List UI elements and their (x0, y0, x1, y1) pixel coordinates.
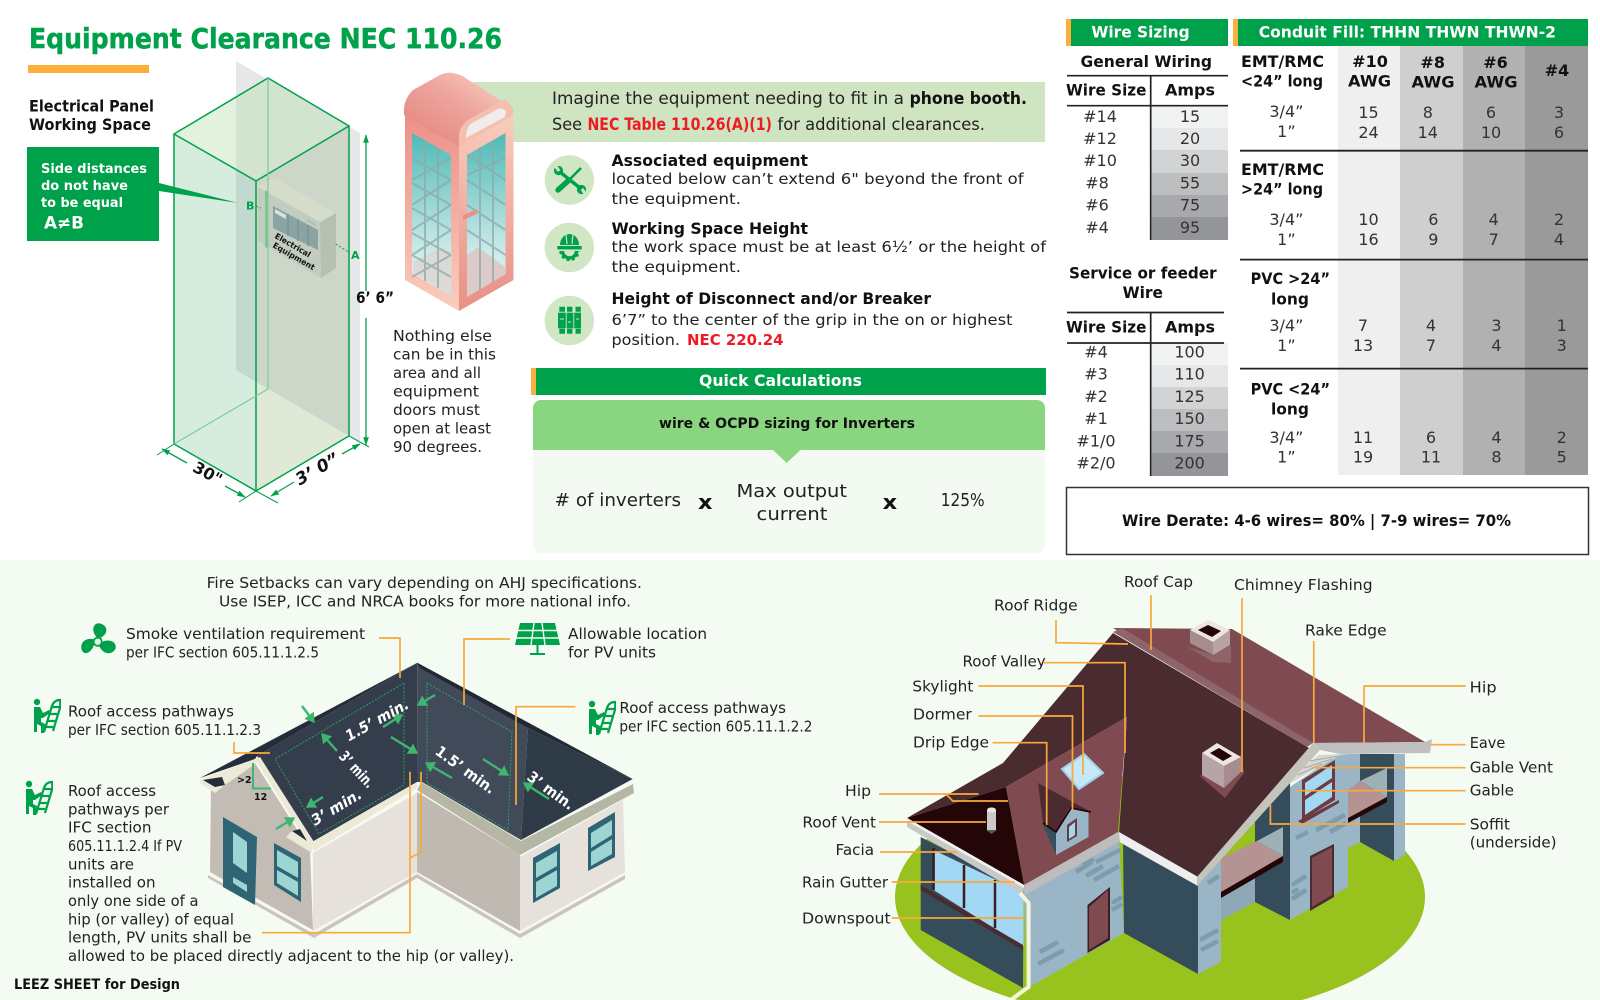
icon: tools (545, 155, 594, 205)
table: service or feeder wire: Service or feeder (1069, 264, 1217, 283)
text: nothing else can be in this area: doors must (393, 401, 480, 419)
row: PVC over 24 in: 1” (1277, 336, 1296, 355)
row: PVC under 24 in: 1” (1277, 448, 1296, 466)
title: Equipment Clearance NEC 110.26 (29, 22, 502, 55)
electrical equipment box: Equipment (271, 241, 316, 272)
panel: quick calculation formula: x (883, 490, 897, 514)
table: general wiring: 15 (1180, 107, 1200, 126)
item: height of disconnect: Height of Disconnect and/or Breaker (612, 289, 931, 308)
banner: phone booth: See (552, 115, 582, 134)
header: wire sizing (1066, 19, 1228, 46)
setback dashed outlines (275, 683, 512, 834)
callout: side distances: A≠B (44, 214, 84, 234)
table: conduit fill: #8 (1420, 53, 1445, 72)
label: smoke ventilation (126, 625, 400, 678)
table: general wiring: 20 (1180, 129, 1200, 148)
row: EMT/RMC under 24 in: 3 (1554, 103, 1564, 122)
icon: breaker (545, 296, 594, 345)
label: roof ridge (994, 597, 1128, 644)
table: service or feeder wire: 150 (1174, 409, 1205, 428)
table: general wiring: General Wiring (1080, 52, 1212, 71)
row: PVC under 24 in: 2 (1557, 428, 1567, 447)
row: EMT/RMC over 24 in (1241, 160, 1564, 249)
header: wire sizing: Wire Sizing (1091, 22, 1190, 42)
subheading: electrical panel working space: Working Space (29, 115, 151, 134)
skylight (1062, 754, 1103, 789)
banner: phone booth (473, 82, 1045, 142)
row: PVC over 24 in: 3 (1491, 316, 1502, 335)
row: EMT/RMC under 24 in: 15 (1358, 103, 1379, 122)
darkest hip plane (907, 787, 1024, 885)
item: height of disconnect: NEC 220.24 (687, 331, 784, 349)
subheading: electrical panel working space (29, 96, 154, 134)
row: PVC under 24 in: 19 (1353, 448, 1373, 466)
table: general wiring: 30 (1180, 151, 1200, 170)
row: EMT/RMC under 24 in: 6 (1554, 123, 1564, 142)
panel: quick calculation formula: # of inverters (555, 490, 681, 511)
item: associated equipment: the equipment. (612, 190, 741, 208)
text: nothing else can be in this area: 90 degrees. (393, 438, 482, 456)
table: service or feeder wire: #3 (1084, 364, 1108, 384)
row: EMT/RMC over 24 in: 4 (1489, 210, 1499, 229)
label: roof access 605.11.1.2.4: IFC section (68, 819, 152, 837)
callout: side distances: to be equal (41, 195, 123, 211)
table: general wiring: 95 (1180, 218, 1200, 237)
label: roof access 605.11.1.2.3 (68, 703, 270, 753)
row: EMT/RMC under 24 in: 6 (1486, 103, 1496, 122)
table: service or feeder wire: Wire Size (1066, 318, 1147, 336)
roof dimension labels: 3’ min. (308, 785, 365, 829)
label: roof access 605.11.1.2.2: per IFC section 605.11.1.2.2 (619, 718, 812, 736)
label: skylight: Skylight (912, 678, 973, 696)
row: PVC under 24 in: 6 (1426, 428, 1436, 447)
banner: phone booth: for additional clearances. (778, 115, 985, 134)
icon: solar panel (515, 623, 560, 654)
row: PVC over 24 in: 7 (1358, 316, 1368, 335)
chimney back (1188, 620, 1231, 663)
label: hip left (845, 782, 1008, 801)
row: PVC over 24 in (1251, 269, 1567, 355)
table: service or feeder wire: #1/0 (1076, 432, 1116, 450)
label: hip right: Hip (1470, 679, 1497, 697)
label: skylight (912, 678, 1083, 775)
table: service or feeder wire: Wire (1123, 283, 1163, 302)
label: rake edge (1305, 622, 1387, 743)
subheading: electrical panel working space: Electrical Panel (29, 96, 154, 116)
label: eave (1430, 734, 1505, 752)
table: conduit fill: AWG (1412, 73, 1454, 92)
table: service or feeder wire (1066, 264, 1228, 476)
banner: phone booth: Imagine the equipment needing to fit in a (552, 89, 904, 108)
header: quick calculations (531, 368, 1046, 395)
item: associated equipment: located below can’t extend 6" beyond the front of (612, 170, 1024, 188)
illustration: house anatomy (895, 620, 1432, 1000)
panel: quick calculation formula: current (756, 504, 828, 525)
label: roof access 605.11.1.2.4: installed on (68, 874, 156, 892)
downspout (1012, 893, 1029, 999)
label: roof access 605.11.1.2.4: Roof access (68, 782, 156, 800)
item: height of disconnect: position. (612, 331, 680, 349)
label: roof access 605.11.1.2.4: hip (or valley) of equal (68, 910, 234, 928)
roof dimension labels: 3’ min. (524, 768, 578, 814)
text: nothing else can be in this area: can be in this (393, 346, 496, 364)
pitch indicator: >2 (237, 775, 252, 786)
label: soffit: Soffit (1470, 815, 1510, 833)
illustration: phone booth (404, 73, 514, 311)
illustration: fire setback house (200, 663, 634, 938)
label: hip left: Hip (845, 782, 871, 800)
table: service or feeder wire: #2/0 (1076, 454, 1116, 472)
working space 3D diagram: A (351, 249, 360, 262)
row: PVC under 24 in: 3/4” (1269, 428, 1303, 447)
row: PVC over 24 in: PVC >24” (1251, 269, 1330, 288)
labels: house anatomy (802, 573, 1556, 927)
row: PVC over 24 in: 3/4” (1269, 316, 1303, 335)
callout: side distances (27, 147, 238, 241)
label: roof access 605.11.1.2.4: 605.11.1.2.4 If PV (68, 837, 182, 855)
electrical equipment box (258, 178, 336, 278)
text: nothing else can be in this area (393, 327, 496, 456)
table: general wiring: #14 (1083, 107, 1117, 126)
title (28, 22, 502, 73)
roof dimension labels: 3’ min. (335, 747, 378, 792)
table: conduit fill: AWG (1348, 72, 1391, 90)
label: smoke ventilation: per IFC section 605.11.1.2.5 (126, 644, 319, 662)
item: height of disconnect (545, 289, 1012, 349)
icon: ventilation fan (81, 623, 116, 653)
row: PVC over 24 in: 4 (1426, 316, 1436, 335)
label: drip edge (913, 733, 1047, 825)
item: working space height (545, 219, 1047, 276)
label: soffit: (underside) (1470, 834, 1556, 852)
table: service or feeder wire: #4 (1084, 342, 1108, 362)
row: EMT/RMC over 24 in: 6 (1428, 210, 1438, 229)
dark roof plane (907, 633, 1309, 877)
label: roof access 605.11.1.2.4 (68, 772, 514, 965)
label: roof valley (962, 653, 1125, 753)
row: EMT/RMC over 24 in: 1” (1277, 230, 1296, 249)
label: dormer: Dormer (913, 705, 972, 723)
row: PVC over 24 in: 4 (1491, 336, 1502, 355)
text: fire setbacks: Use ISEP, ICC and NRCA books for more national info. (219, 593, 631, 611)
text: nothing else can be in this area: Nothing else (393, 327, 492, 345)
row: PVC under 24 in: 8 (1491, 448, 1502, 466)
row: EMT/RMC over 24 in: 2 (1554, 210, 1564, 229)
working space 3D diagram: 30" (190, 457, 226, 489)
label: allowable PV location: for PV units (568, 644, 656, 662)
text: fire setbacks (207, 574, 642, 611)
dormer (1038, 783, 1091, 855)
table: conduit fill: #6 (1483, 53, 1508, 72)
panel: quick calculation formula: Max output (736, 481, 847, 502)
table: general wiring: #12 (1083, 129, 1117, 148)
row: PVC under 24 in (1251, 380, 1567, 466)
label: gable vent: Gable Vent (1470, 759, 1553, 777)
table: service or feeder wire: 100 (1174, 342, 1205, 362)
label: roof access 605.11.1.2.3: per IFC section 605.11.1.2.3 (68, 721, 261, 739)
working space 3D diagram: B (246, 200, 254, 213)
label: roof cap: Roof Cap (1124, 573, 1193, 591)
label: roof valley: Roof Valley (962, 653, 1046, 671)
table: conduit fill (1240, 46, 1588, 475)
working space 3D diagram: 6’ 6” (356, 288, 394, 307)
label: drip edge: Drip Edge (913, 733, 989, 751)
row: EMT/RMC over 24 in: 9 (1428, 230, 1438, 249)
working space 3D diagram: 3’ 0” (292, 449, 343, 490)
roof dimension labels: 1.5’ min. (432, 742, 499, 798)
table: conduit fill: AWG (1474, 73, 1518, 92)
header: conduit fill (1233, 19, 1588, 46)
label: roof vent: Roof Vent (802, 813, 876, 831)
item: associated equipment (545, 151, 1024, 208)
table: conduit fill: #4 (1545, 61, 1569, 80)
table: general wiring: #6 (1085, 196, 1109, 214)
label: allowable PV location: Allowable location (568, 625, 707, 643)
label: roof access 605.11.1.2.4: length, PV units shall be (68, 929, 252, 947)
ground (895, 775, 1425, 1000)
label: roof access 605.11.1.2.2 (516, 699, 812, 805)
row: PVC over 24 in: 7 (1426, 336, 1436, 355)
table: conduit fill: #10 (1352, 52, 1388, 71)
row: PVC under 24 in: 11 (1421, 448, 1441, 466)
label: rain gutter: Rain Gutter (802, 873, 889, 891)
row: EMT/RMC over 24 in: 10 (1358, 210, 1379, 229)
panel: quick calculation formula (533, 400, 1045, 553)
label: roof cap (1124, 573, 1193, 650)
setback arrows (276, 695, 549, 829)
row: PVC over 24 in: 13 (1353, 336, 1373, 355)
row: EMT/RMC under 24 in: <24” long (1241, 72, 1323, 90)
row: PVC over 24 in: 3 (1557, 336, 1567, 355)
label: dormer (913, 705, 1072, 810)
table: general wiring: Wire Size (1066, 80, 1147, 99)
working space 3D diagram (157, 61, 394, 503)
row: PVC over 24 in: long (1271, 289, 1309, 308)
table: service or feeder wire: 125 (1174, 387, 1205, 406)
text: fire setbacks: Fire Setbacks can vary depending on AHJ specifications. (207, 574, 642, 592)
row: EMT/RMC under 24 in: 3/4” (1269, 102, 1303, 121)
windows (274, 812, 615, 903)
row: EMT/RMC under 24 in: 1” (1277, 122, 1296, 141)
banner: phone booth: NEC Table 110.26(A)(1) (588, 115, 772, 134)
row: EMT/RMC over 24 in: >24” long (1241, 180, 1323, 198)
label: downspout: Downspout (802, 909, 891, 927)
row: PVC under 24 in: 4 (1491, 428, 1502, 447)
row: PVC under 24 in: long (1271, 400, 1309, 418)
pitch indicator: 12 (254, 792, 267, 803)
label: eave: Eave (1470, 734, 1505, 752)
icon: roof access person lower (26, 780, 53, 815)
row: PVC under 24 in: PVC <24” (1251, 380, 1330, 398)
roof dimension labels: 1.5’ min. (342, 695, 412, 745)
panel: bottom background (0, 560, 1600, 1000)
roof vent (986, 808, 997, 834)
label: roof access 605.11.1.2.4: only one side of a (68, 892, 198, 910)
panel: quick calculation formula: x (698, 490, 713, 514)
label: roof access 605.11.1.2.2: Roof access pathways (619, 699, 786, 717)
pitch indicator (237, 763, 271, 803)
row: EMT/RMC under 24 in: 24 (1358, 123, 1379, 142)
row: EMT/RMC under 24 in (1241, 52, 1564, 142)
table: general wiring: 55 (1180, 174, 1200, 192)
table: general wiring: #4 (1085, 218, 1109, 237)
table: general wiring: Amps (1165, 80, 1215, 99)
door (223, 817, 257, 905)
icon: roof access person left (34, 698, 61, 733)
label: facia: Facia (836, 841, 874, 859)
icon: helmet and gear (545, 223, 594, 272)
label: roof access 605.11.1.2.4: allowed to be placed directly adjacent to the hip (or valley). (68, 947, 514, 965)
electrical equipment box: Electrical (273, 232, 313, 259)
ridge strip (1113, 628, 1313, 747)
table: service or feeder wire: 200 (1174, 454, 1205, 472)
house walls (208, 763, 625, 938)
label: smoke ventilation: Smoke ventilation requirement (126, 625, 365, 643)
label: allowable PV location (464, 625, 707, 705)
footer credit: LEEZ SHEET for Design (14, 977, 180, 993)
label: rake edge: Rake Edge (1305, 622, 1387, 640)
lower left bay walls (921, 827, 1283, 988)
label: roof access 605.11.1.2.3: Roof access pathways (68, 703, 234, 721)
header: quick calculations: Quick Calculations (699, 371, 862, 390)
roof dimension labels (308, 695, 578, 829)
row: EMT/RMC over 24 in: EMT/RMC (1241, 160, 1324, 179)
item: working space height: the work space must be at least 6½’ or the height of (612, 238, 1047, 256)
banner: phone booth: phone booth. (910, 89, 1027, 108)
panel: quick calculation formula: 125% (941, 490, 985, 511)
row: EMT/RMC over 24 in: 16 (1358, 230, 1379, 249)
callout: wire derate: Wire Derate: 4-6 wires= 80% | 7-9 wires= 70% (1122, 511, 1511, 531)
table: general wiring: #8 (1085, 174, 1109, 192)
row: EMT/RMC over 24 in: 7 (1489, 230, 1499, 249)
label: roof access 605.11.1.2.4: pathways per (68, 800, 170, 818)
central tower (1255, 754, 1348, 920)
label: hip right (1364, 679, 1497, 743)
label: roof access 605.11.1.2.4: units are (68, 855, 134, 873)
table: general wiring: 75 (1180, 196, 1200, 214)
row: EMT/RMC under 24 in: 14 (1418, 123, 1438, 142)
back roof plane (1113, 628, 1425, 743)
table: service or feeder wire: 175 (1174, 432, 1205, 450)
row: EMT/RMC under 24 in: 10 (1481, 123, 1501, 142)
table: service or feeder wire: #1 (1084, 409, 1108, 428)
panel: quick calculation formula: wire & OCPD sizing for Inverters (659, 416, 915, 432)
label: roof ridge: Roof Ridge (994, 597, 1078, 615)
callout: side distances: do not have (41, 178, 128, 194)
text: nothing else can be in this area: equipment (393, 382, 479, 400)
header: conduit fill: Conduit Fill: THHN THWN THWN-2 (1259, 22, 1556, 42)
item: working space height: Working Space Height (612, 219, 808, 238)
item: associated equipment: Associated equipment (612, 151, 808, 170)
item: height of disconnect: 6’7” to the center of the grip in the on or highest (612, 311, 1012, 329)
item: working space height: the equipment. (612, 258, 741, 276)
row: PVC under 24 in: 5 (1557, 448, 1567, 466)
label: facia (836, 841, 957, 859)
callout: wire derate (1066, 488, 1588, 554)
table: general wiring: #10 (1083, 151, 1117, 170)
table: general wiring (1066, 52, 1228, 240)
row: EMT/RMC over 24 in: 4 (1554, 230, 1564, 249)
eaves and trim (907, 739, 1432, 895)
row: EMT/RMC under 24 in: EMT/RMC (1241, 52, 1324, 71)
far right wing (1348, 754, 1405, 861)
text: nothing else can be in this area: area and all (393, 364, 481, 382)
roof (200, 663, 634, 855)
text: nothing else can be in this area: open at least (393, 420, 491, 438)
dormer roof plane (1006, 717, 1127, 885)
row: PVC over 24 in: 1 (1557, 316, 1567, 335)
chimney front (1200, 743, 1244, 798)
label: soffit (1270, 805, 1556, 852)
label: chimney flashing: Chimney Flashing (1234, 576, 1373, 594)
table: service or feeder wire: Amps (1165, 318, 1215, 336)
table: service or feeder wire: 110 (1174, 364, 1205, 384)
label: gable: Gable (1470, 781, 1514, 799)
row: PVC under 24 in: 11 (1353, 428, 1373, 447)
row: EMT/RMC under 24 in: 8 (1423, 103, 1433, 122)
icon: roof access person right (588, 700, 616, 735)
callout: side distances: Side distances (41, 161, 147, 177)
row: EMT/RMC over 24 in: 3/4” (1269, 210, 1303, 229)
table: service or feeder wire: #2 (1084, 387, 1108, 406)
